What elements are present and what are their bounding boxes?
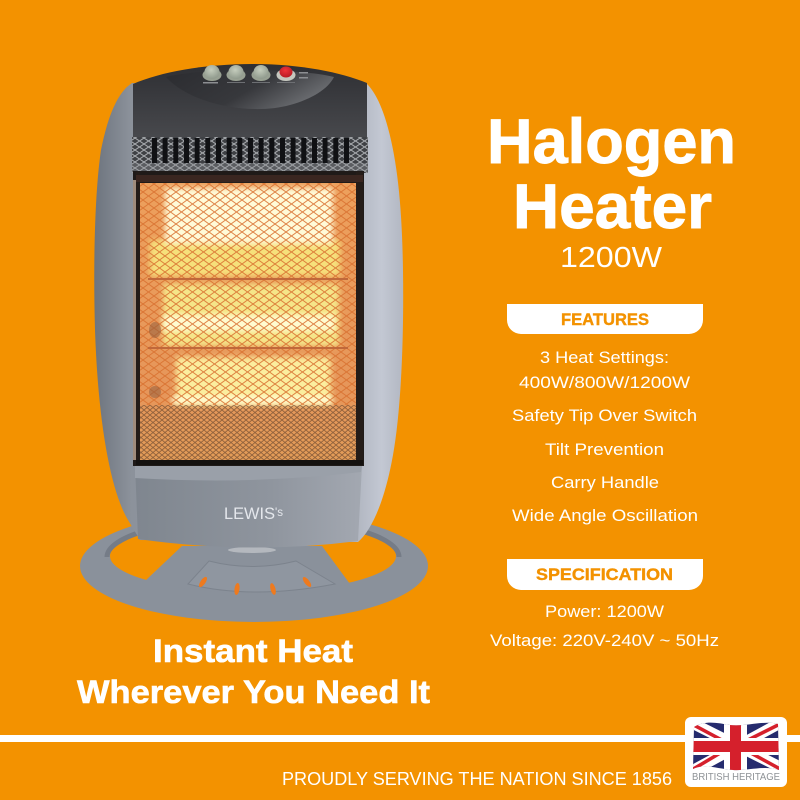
glowing lamp: bottom bbox=[172, 357, 332, 405]
glowing lamp: middle bbox=[163, 284, 339, 346]
specification list: Power: 1200W bbox=[545, 602, 664, 621]
tagline bbox=[77, 633, 430, 710]
heating window with glowing lamps bbox=[133, 171, 364, 466]
base ring bbox=[80, 510, 428, 622]
product title bbox=[487, 107, 736, 274]
features list: Safety Tip Over Switch bbox=[512, 406, 697, 425]
specification heading pill bbox=[507, 559, 703, 590]
glowing lamp: top bbox=[150, 188, 340, 276]
features list: Wide Angle Oscillation bbox=[512, 506, 698, 525]
footer slogan: PROUDLY SERVING THE NATION SINCE 1856 bbox=[282, 768, 672, 789]
specification heading pill: SPECIFICATION bbox=[536, 565, 673, 584]
footer divider line bbox=[0, 735, 700, 742]
features list: Tilt Prevention bbox=[545, 440, 664, 459]
heater body shell bbox=[94, 83, 403, 542]
specification list: Voltage: 220V-240V ~ 50Hz bbox=[490, 631, 719, 650]
icon: union flag bbox=[693, 722, 779, 770]
specification list bbox=[490, 602, 719, 650]
tagline: Wherever You Need It bbox=[77, 674, 430, 710]
british heritage badge: BRITISH HERITAGE bbox=[692, 772, 780, 783]
front lower panel bbox=[135, 465, 362, 548]
features heading pill: FEATURES bbox=[561, 310, 649, 329]
features list: Carry Handle bbox=[551, 473, 659, 492]
control knobs bbox=[202, 65, 308, 84]
brand logo: 's bbox=[275, 505, 283, 519]
product title: Halogen bbox=[487, 107, 736, 177]
features list: 400W/800W/1200W bbox=[519, 373, 690, 392]
base orange indicator marks bbox=[198, 576, 313, 595]
british heritage badge bbox=[685, 717, 800, 787]
brand logo: LEWIS bbox=[224, 504, 277, 523]
product title: 1200W bbox=[560, 242, 663, 274]
top vent grille bbox=[132, 137, 368, 173]
features list: 3 Heat Settings: bbox=[540, 348, 669, 367]
product title: Heater bbox=[513, 172, 712, 242]
features list bbox=[512, 348, 698, 525]
dark top control panel bbox=[133, 64, 367, 139]
swivel neck bbox=[228, 547, 276, 553]
heater product illustration bbox=[80, 64, 428, 622]
tagline: Instant Heat bbox=[153, 633, 353, 669]
features heading pill bbox=[507, 304, 703, 334]
